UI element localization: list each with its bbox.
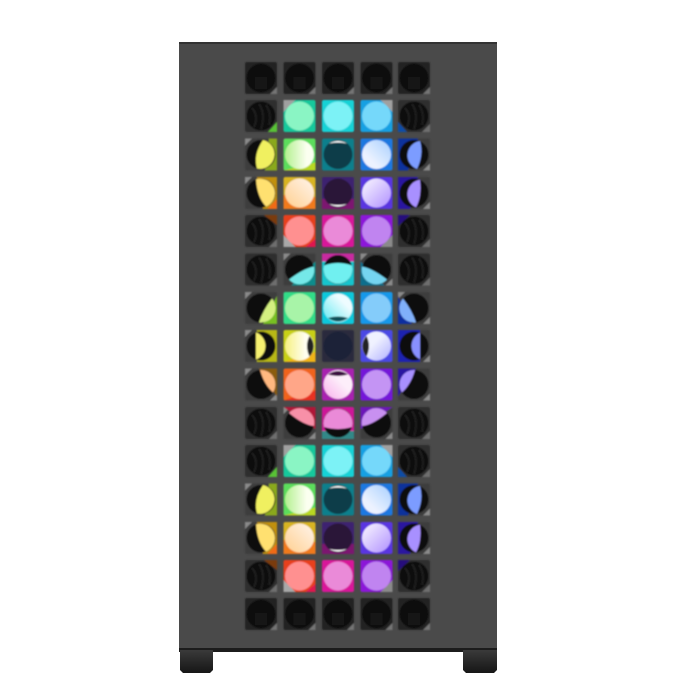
bottom RGB fan <box>245 445 430 592</box>
top RGB fan <box>245 100 430 247</box>
middle RGB fan <box>245 254 430 439</box>
bottom dark row <box>245 598 430 630</box>
case body <box>179 42 497 652</box>
front mesh grid <box>245 62 430 630</box>
left foot <box>180 650 213 673</box>
top dark row <box>245 62 430 94</box>
right foot <box>463 650 497 673</box>
